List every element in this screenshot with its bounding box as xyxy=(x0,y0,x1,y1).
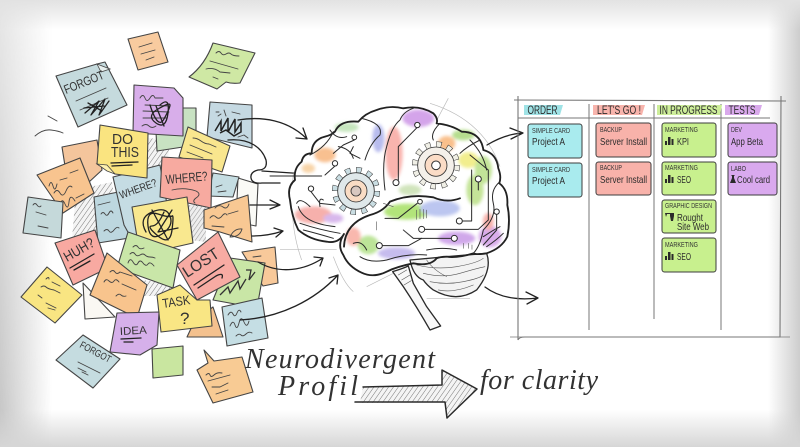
note: IDEA xyxy=(110,312,159,355)
note: green top xyxy=(189,43,255,89)
gear right xyxy=(415,145,457,186)
sticky notes pile xyxy=(21,32,278,403)
note: blue scribble xyxy=(207,102,252,148)
column header: ORDER: ORDER xyxy=(528,103,558,117)
brain illustration xyxy=(270,98,509,330)
card: KPI xyxy=(662,123,716,157)
arrow 1 xyxy=(238,119,307,139)
card: Cool card: Cool card xyxy=(737,174,770,186)
arrow 3 xyxy=(250,200,280,209)
note: blue right xyxy=(208,173,239,197)
note: green xyxy=(117,232,180,288)
note: DO THIS xyxy=(97,125,148,178)
card: Cool card xyxy=(728,162,777,195)
card: App Beta: DEV xyxy=(731,127,742,134)
icon: flask xyxy=(730,175,736,183)
card: Project A second xyxy=(528,163,582,197)
arrow 6 xyxy=(240,275,338,320)
note: orange behind xyxy=(62,140,102,195)
card: SEO: SEO xyxy=(677,174,691,186)
card: Rought Site Web: Site Web xyxy=(677,221,709,233)
note: purple scribble xyxy=(133,85,183,136)
card: SEO second xyxy=(662,238,716,272)
note: blue WHERE? xyxy=(113,165,168,243)
hatched gaps behind notes xyxy=(72,138,206,296)
icon: design tool xyxy=(665,213,674,221)
card: Rought Site Web: Rought xyxy=(677,212,703,224)
icon: bar chart xyxy=(665,175,674,183)
note: orange far right xyxy=(242,247,278,286)
cerebellum xyxy=(410,253,488,297)
note: LOST: LOST xyxy=(180,245,223,281)
arrow to kanban lower xyxy=(485,287,538,304)
arrow to kanban top xyxy=(487,128,523,145)
card: Cool card: LABO xyxy=(731,166,746,173)
note: pink WHERE? xyxy=(160,157,212,208)
card: Project A: Project A xyxy=(532,136,565,148)
card: SEO: MARKETING xyxy=(665,165,698,172)
card: Server Install second xyxy=(596,162,651,195)
hatched big arrow xyxy=(355,370,477,418)
icon: bar chart xyxy=(665,252,674,260)
card: Server Install second: Server Install xyxy=(600,174,647,186)
card: App Beta xyxy=(728,123,777,157)
card: Project A: SIMPLE CARD xyxy=(532,128,570,135)
note: green right xyxy=(213,258,265,308)
note: blue bottom right xyxy=(222,298,268,346)
card: Rought Site Web xyxy=(662,200,716,233)
arrows out of brain xyxy=(485,128,538,304)
brain outer outline xyxy=(289,107,509,275)
script title: Profil: Profil xyxy=(277,371,358,402)
motion lines xyxy=(35,116,63,136)
circuit nodes xyxy=(308,122,499,249)
note: LOST xyxy=(177,232,240,300)
sulci folds xyxy=(297,108,503,261)
card: Server Install xyxy=(596,123,651,157)
column header: IN PROGRESS: IN PROGRESS xyxy=(660,103,718,117)
note: yellow scribble xyxy=(132,197,193,255)
note: IDEA: IDEA xyxy=(120,325,148,338)
note: FORGOT xyxy=(56,62,127,127)
faint construction lines xyxy=(280,98,500,298)
note: TASK xyxy=(157,285,212,332)
card: Project A second: Project A xyxy=(532,175,565,187)
card: SEO second: MARKETING xyxy=(665,242,698,249)
note: HUH? xyxy=(55,230,108,285)
kanban board xyxy=(510,96,790,340)
arrow 4 xyxy=(252,228,283,237)
connector to brain xyxy=(228,140,322,183)
script caption: for clarity: for clarity xyxy=(480,365,599,396)
arrow 5 xyxy=(258,257,323,270)
card: KPI: KPI xyxy=(677,136,689,148)
card: Project A second: SIMPLE CARD xyxy=(532,167,570,174)
card: Project A xyxy=(528,124,582,158)
board frame xyxy=(510,96,790,340)
watercolour patches xyxy=(295,110,501,259)
card: App Beta: App Beta xyxy=(731,136,763,148)
note: pink WHERE?: WHERE? xyxy=(165,168,208,187)
note: orange middle xyxy=(90,253,147,318)
note: green behind purple xyxy=(156,108,196,151)
note: FORGOT: FORGOT xyxy=(62,68,106,97)
note: blue mid xyxy=(94,190,136,243)
note: DO THIS: DO xyxy=(112,131,133,148)
note: yellow left xyxy=(21,267,82,323)
note: orange left xyxy=(37,158,94,213)
note: yellow lines xyxy=(179,127,230,172)
arrows into brain xyxy=(228,119,338,320)
icon: bar chart xyxy=(665,137,674,145)
note: blue WHERE?: WHERE? xyxy=(118,177,159,202)
column header: TESTS: TESTS xyxy=(728,103,756,117)
note: orange right xyxy=(204,195,252,242)
note: orange top xyxy=(128,32,168,70)
card: KPI: MARKETING xyxy=(665,127,698,134)
note: green square xyxy=(152,346,183,378)
brain fill outline xyxy=(289,107,509,275)
card: Server Install: Server Install xyxy=(600,136,647,148)
note: FORGOT lower: FORGOT xyxy=(78,340,113,366)
script title: Neurodivergent: Neurodivergent xyxy=(244,344,436,375)
card: Server Install: BACKUP xyxy=(600,127,622,134)
gear left xyxy=(335,170,377,212)
card: SEO xyxy=(662,162,716,195)
note: blue low left xyxy=(23,197,63,238)
note: orange speech xyxy=(197,350,253,403)
note: HUH?: HUH? xyxy=(60,234,97,265)
card: Rought Site Web: GRAPHIC DESIGN xyxy=(665,203,712,210)
card: SEO second: SEO xyxy=(677,251,691,263)
circuit traces xyxy=(270,127,497,249)
brain stem xyxy=(393,266,441,330)
note: DO THIS: THIS xyxy=(111,144,139,161)
note: orange behind TASK xyxy=(187,307,223,337)
column header: LET'S GO !: LET'S GO ! xyxy=(597,103,641,117)
note: FORGOT lower xyxy=(56,335,120,388)
note: TASK: TASK xyxy=(161,292,191,311)
note: TASK: ? xyxy=(180,309,189,328)
note: white back sheets xyxy=(83,178,258,319)
temporal lobe outline xyxy=(344,196,460,247)
card: Server Install second: BACKUP xyxy=(600,165,622,172)
